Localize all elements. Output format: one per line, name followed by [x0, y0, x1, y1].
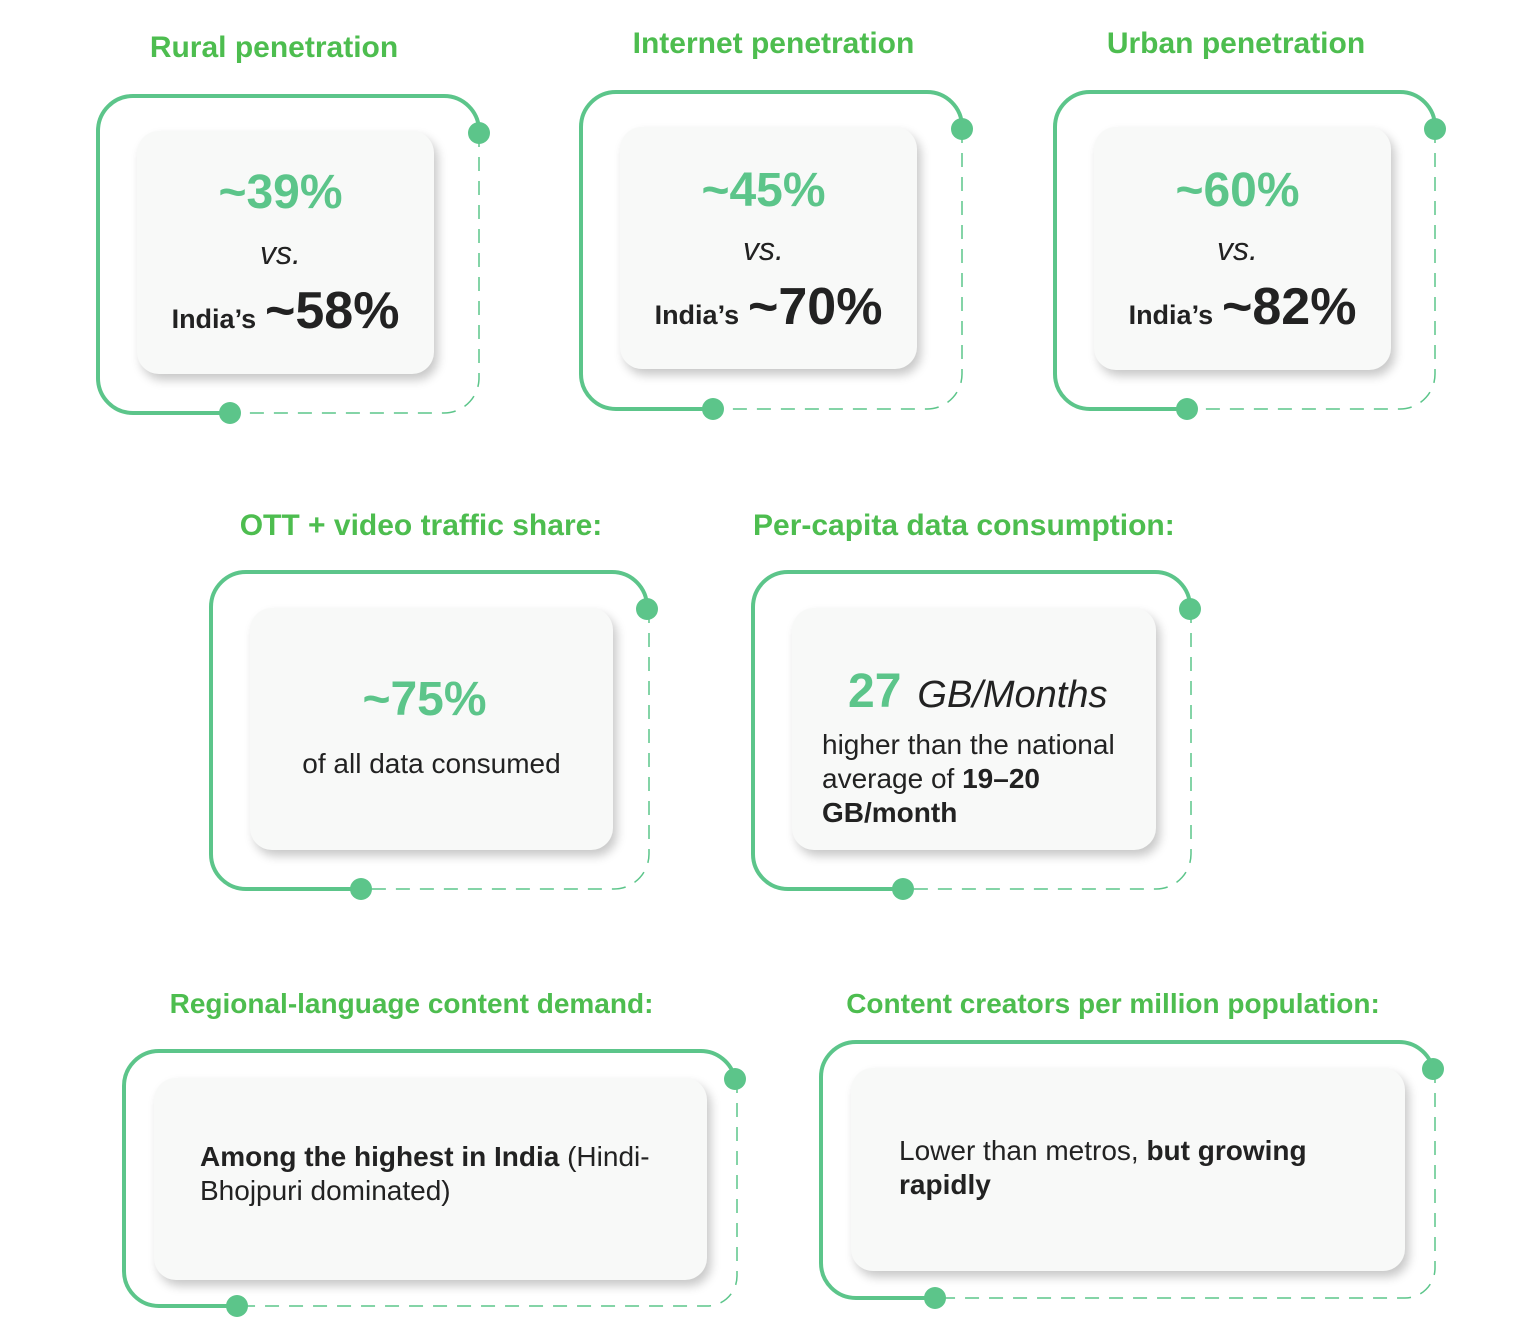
panel: per-capita — [751, 570, 1201, 900]
card: regional text: Among the highest in India (Hindi-Bhojpuri dominated) — [200, 1141, 650, 1206]
card: urban stats: India’s ~82% — [1129, 278, 1356, 336]
card: creators text — [851, 1068, 1405, 1271]
card: rural stats: vs. — [260, 235, 301, 271]
card: internet stats: India’s ~70% — [655, 278, 882, 336]
card: regional text — [154, 1078, 707, 1280]
panel: internet — [579, 90, 973, 420]
heading: per-capita: Per-capita data consumption: — [753, 509, 1175, 542]
card: per-capita stat: higher than the national average of 19–20 GB/month — [822, 729, 1115, 828]
card: rural stats: India’s ~58% — [172, 282, 399, 340]
heading: internet: Internet penetration — [633, 27, 914, 60]
heading: OTT: OTT + video traffic share: — [240, 509, 602, 542]
heading: urban: Urban penetration — [1107, 27, 1365, 60]
card: urban stats: vs. — [1217, 231, 1258, 267]
panel: rural — [96, 94, 490, 424]
card: internet stats: vs. — [743, 231, 784, 267]
card: urban stats — [1094, 127, 1391, 370]
panel: urban — [1053, 90, 1446, 420]
card: per-capita stat — [792, 608, 1156, 850]
card: urban stats: ~60% — [1175, 164, 1300, 217]
card: internet stats — [620, 127, 917, 369]
card: rural stats: ~39% — [218, 166, 343, 219]
card: OTT stat — [250, 608, 613, 850]
card: OTT stat: ~75% — [362, 673, 487, 726]
panel: OTT — [209, 570, 658, 900]
heading: rural: Rural penetration — [150, 31, 398, 64]
card: per-capita stat: 27 GB/Months — [848, 665, 1107, 718]
heading: regional: Regional-language content demand: — [170, 988, 653, 1019]
card: rural stats — [137, 131, 434, 374]
card: internet stats: ~45% — [701, 164, 826, 217]
card: OTT stat: of all data consumed — [302, 748, 561, 779]
panel: regional — [122, 1049, 746, 1317]
panel: creators — [819, 1040, 1444, 1309]
heading: creators: Content creators per million population: — [846, 988, 1380, 1019]
card: creators text: Lower than metros, but growing rapidly — [899, 1135, 1307, 1200]
